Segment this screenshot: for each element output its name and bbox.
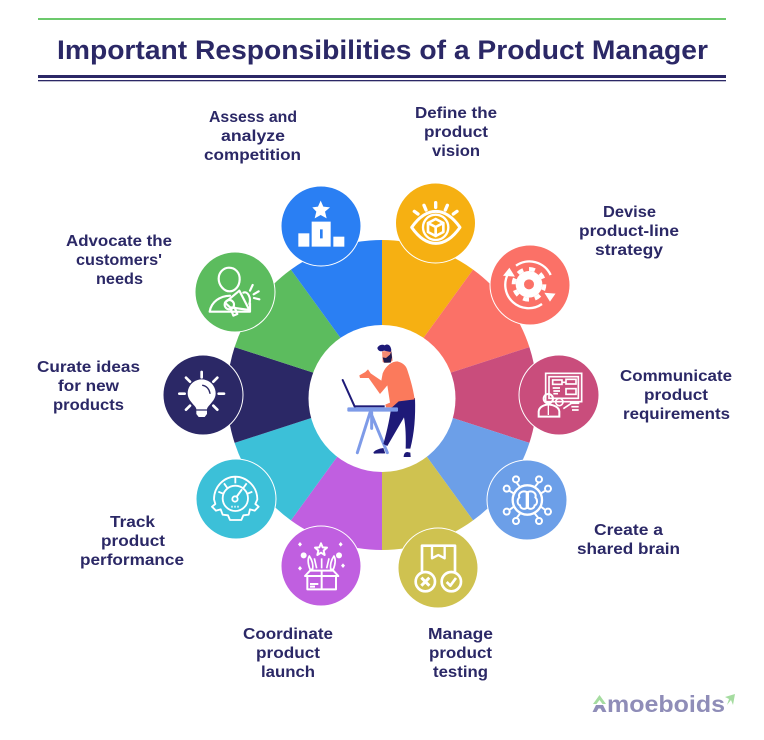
- label: assess and analyze competition: Assess and: [209, 109, 297, 126]
- label: curate ideas for new products: for new: [58, 378, 120, 395]
- icon: podium with star: [298, 201, 344, 247]
- title: Important Responsibilities of a Product Manager: [57, 35, 709, 65]
- label: manage product testing: product: [429, 645, 493, 662]
- icon: gauge with gear: [212, 477, 259, 520]
- label: devise product-line strategy: product-line: [579, 223, 679, 240]
- label: manage product testing: Manage: [428, 626, 493, 643]
- label: coordinate product launch: product: [256, 645, 321, 662]
- label: coordinate product launch: Coordinate: [243, 626, 333, 643]
- label: define the product vision: [415, 105, 497, 160]
- node: track product performance: [196, 459, 276, 539]
- label: curate ideas for new products: products: [53, 397, 124, 414]
- node: create a shared brain: [487, 460, 567, 540]
- label: manage product testing: testing: [433, 664, 488, 681]
- label: communicate product requirements: requirements: [623, 406, 730, 423]
- label: create a shared brain: [577, 522, 680, 558]
- node: assess and analyze competition: [281, 186, 361, 266]
- label: create a shared brain: Create a: [594, 522, 663, 539]
- label: assess and analyze competition: [204, 109, 301, 164]
- icon: networked brain: [504, 476, 551, 524]
- label: communicate product requirements: Communicate: [620, 368, 732, 385]
- label: curate ideas for new products: [37, 359, 140, 414]
- label: advocate the customers' needs: customers': [76, 252, 162, 269]
- node: advocate the customers' needs: [195, 252, 275, 332]
- icon: package with cross and check: [416, 546, 461, 591]
- label: devise product-line strategy: [579, 204, 679, 259]
- label: advocate the customers' needs: Advocate the: [66, 233, 172, 250]
- node: devise product-line strategy: [490, 245, 570, 325]
- label: create a shared brain: shared brain: [577, 541, 680, 558]
- node: communicate product requirements: [519, 355, 599, 435]
- logo: Amoeboids: moeboids: [607, 691, 725, 717]
- label: define the product vision: product: [424, 124, 489, 141]
- label: define the product vision: Define the: [415, 105, 497, 122]
- illustration: man at laptop: [343, 344, 415, 457]
- segmented wheel: [227, 240, 537, 550]
- label: devise product-line strategy: strategy: [595, 242, 663, 259]
- label: define the product vision: vision: [432, 143, 480, 160]
- node: manage product testing: [398, 528, 478, 608]
- label: coordinate product launch: launch: [261, 664, 315, 681]
- label: track product performance: performance: [80, 552, 184, 569]
- label: advocate the customers' needs: [66, 233, 172, 288]
- icon: person with megaphone: [210, 268, 259, 316]
- icon: presenter and screen: [539, 373, 582, 417]
- node: curate ideas for new products: [163, 355, 243, 435]
- label: devise product-line strategy: Devise: [603, 204, 656, 221]
- header rules and title: [38, 18, 726, 81]
- label: communicate product requirements: product: [644, 387, 709, 404]
- label: assess and analyze competition: analyze: [221, 128, 285, 145]
- node: coordinate product launch: [281, 526, 361, 606]
- label: assess and analyze competition: competition: [204, 147, 301, 164]
- center hub with product manager illustration: [308, 325, 456, 472]
- label: track product performance: [80, 514, 184, 569]
- label: communicate product requirements: [620, 368, 732, 423]
- label: coordinate product launch: [243, 626, 333, 681]
- icon: light bulb: [179, 372, 224, 417]
- label: track product performance: product: [101, 533, 166, 550]
- icon: gear with cycle arrows: [504, 261, 555, 308]
- logo arrow: [725, 694, 735, 705]
- icon: eye with cube: [412, 203, 460, 243]
- node: define the product vision: [396, 183, 476, 263]
- icon: launch box with stars: [298, 542, 345, 589]
- label: curate ideas for new products: Curate ideas: [37, 359, 140, 376]
- label: advocate the customers' needs: needs: [96, 271, 143, 288]
- label: manage product testing: [428, 626, 493, 681]
- label: track product performance: Track: [110, 514, 155, 531]
